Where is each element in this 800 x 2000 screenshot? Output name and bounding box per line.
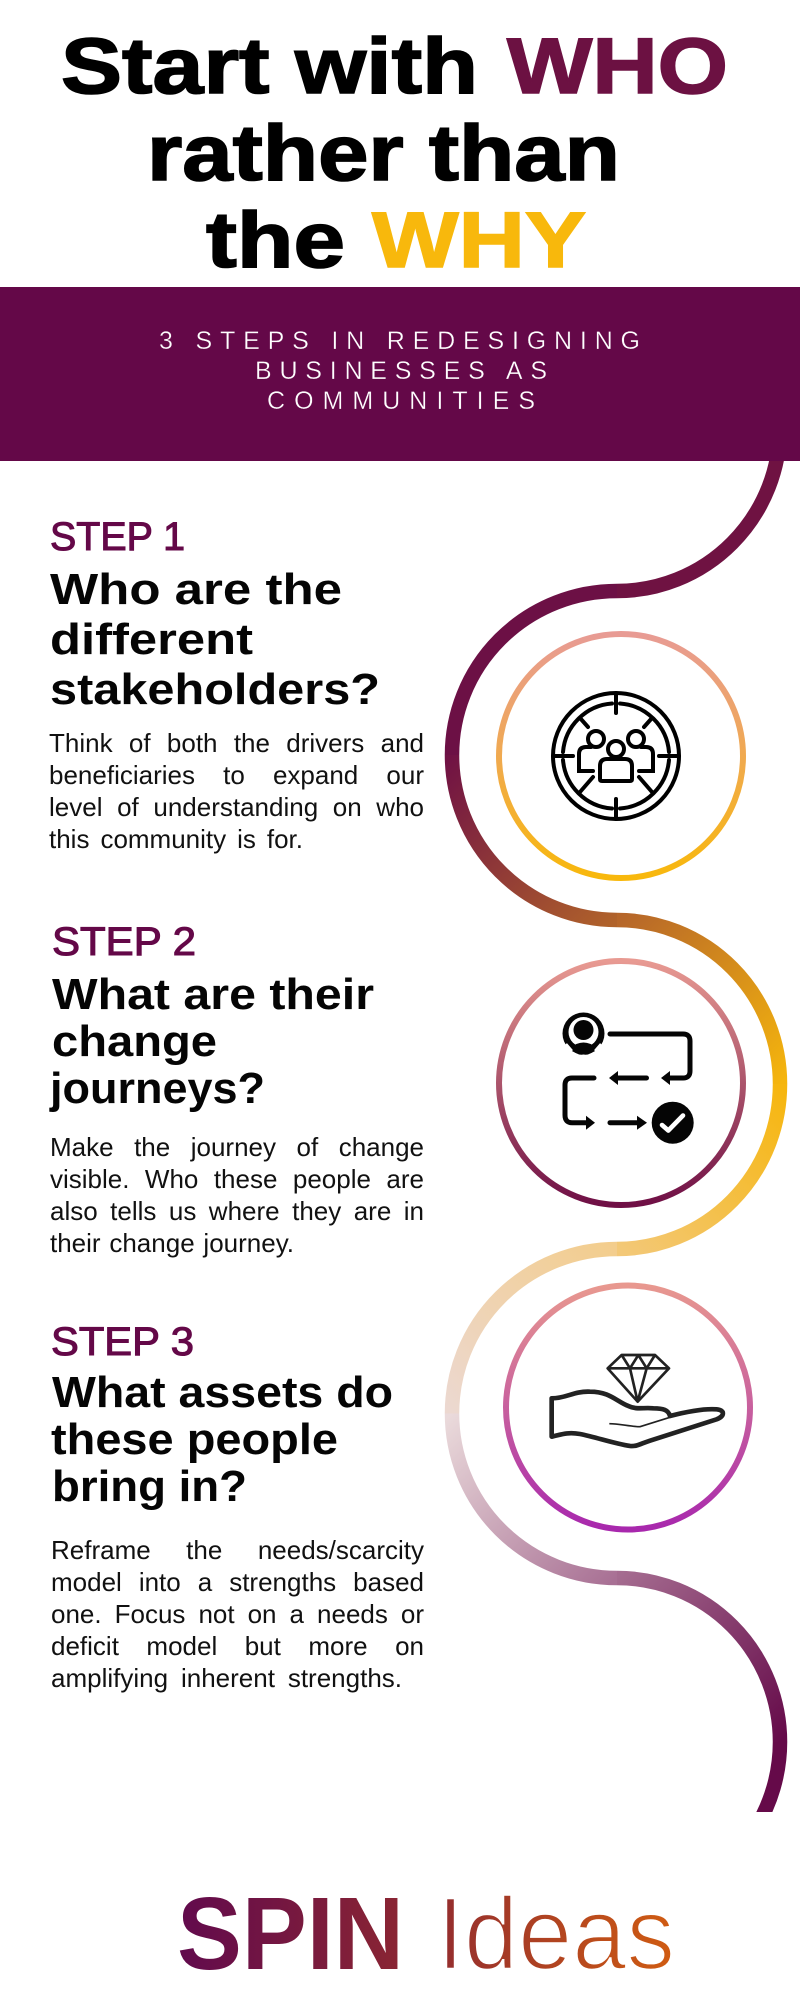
step 3 body text: Reframe the needs/scarcity	[51, 1535, 424, 1565]
panel: step 1: different	[50, 615, 253, 664]
icon: stakeholders in target circle	[499, 634, 743, 878]
panel: step 2: What are their	[52, 970, 374, 1019]
title: rather than	[147, 108, 620, 197]
banner subtitle: BUSINESSES AS	[255, 357, 547, 385]
step 1 body text	[49, 728, 424, 854]
banner subtitle: COMMUNITIES	[267, 387, 535, 415]
icon: hand holding diamond	[506, 1286, 750, 1530]
step 3 body text: model into a strengths based	[51, 1567, 424, 1597]
panel: step 1: STEP 1	[50, 515, 185, 559]
step 1 body text: this community is for.	[49, 824, 303, 854]
step 3 body text: one. Focus not on a needs or	[51, 1599, 424, 1629]
panel: step 1: stakeholders?	[50, 665, 380, 714]
panel: step 3: STEP 3	[51, 1320, 194, 1364]
step 1 body text: Think of both the drivers and	[49, 728, 424, 758]
icon: change journey flow	[499, 961, 743, 1205]
step 1 body text: level of understanding on who	[49, 792, 424, 822]
title: the	[206, 195, 345, 284]
diamond	[608, 1355, 669, 1402]
panel: step 1	[49, 515, 424, 854]
panel: step 2	[49, 920, 424, 1258]
step 1 body text: beneficiaries to expand our	[49, 760, 424, 790]
person badge	[562, 1012, 604, 1055]
title: WHO	[507, 21, 728, 110]
step 2 body text: their change journey.	[50, 1228, 294, 1258]
panel: step 2: STEP 2	[52, 920, 196, 964]
step 3 body text: deficit model but more on	[51, 1631, 424, 1661]
banner subtitle	[159, 327, 640, 415]
title: WHY	[372, 195, 586, 284]
panel: step 3: these people	[51, 1415, 338, 1464]
step 2 body text	[50, 1132, 424, 1258]
step 2 body text: visible. Who these people are	[50, 1164, 424, 1194]
check badge	[652, 1102, 694, 1144]
step 2 body text: Make the journey of change	[50, 1132, 424, 1162]
panel: step 1: Who are the	[50, 565, 342, 614]
panel: step 3: bring in?	[52, 1462, 247, 1511]
step 2 body text: also tells us where they are in	[50, 1196, 424, 1226]
flow arrows	[565, 1034, 690, 1123]
banner subtitle: 3 STEPS IN REDESIGNING	[159, 327, 640, 355]
logo	[177, 1876, 675, 1991]
banner	[0, 287, 800, 461]
title	[61, 21, 728, 284]
hand	[552, 1392, 723, 1446]
panel: step 3: What assets do	[52, 1368, 393, 1417]
panel: step 2: change	[52, 1017, 217, 1066]
logo: Ideas	[437, 1876, 675, 1991]
step 3 body text: amplifying inherent strengths.	[51, 1663, 402, 1693]
panel: step 2: journeys?	[49, 1064, 265, 1113]
logo: SPIN	[177, 1876, 404, 1991]
title: Start with	[61, 21, 478, 110]
panel: step 3	[51, 1320, 424, 1693]
step 3 body text	[51, 1535, 424, 1693]
winding path connecting the steps	[452, 427, 800, 1852]
